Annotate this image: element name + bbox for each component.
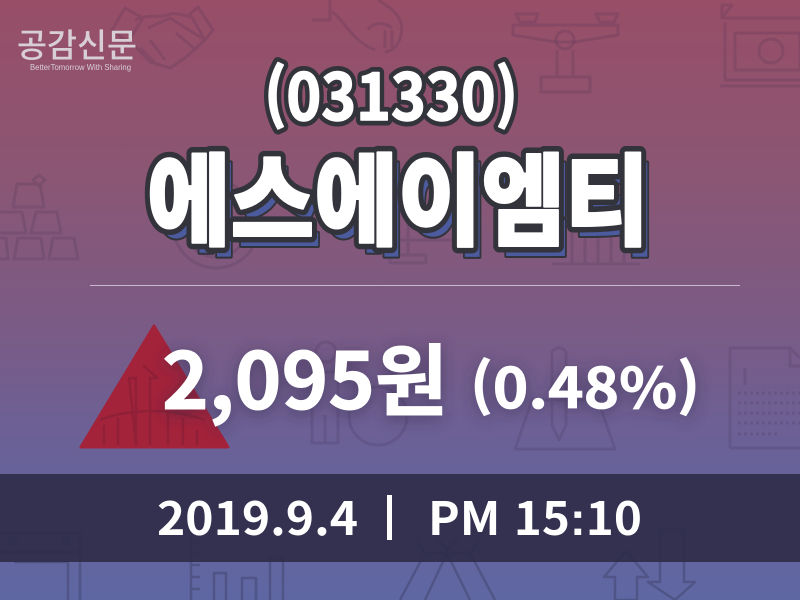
icon: coin <box>173 182 259 268</box>
icon: handshake <box>112 7 213 68</box>
separator <box>387 495 392 540</box>
icon: pencil on paper <box>515 348 615 449</box>
icon: up and down arrows <box>604 530 695 600</box>
icon: money bag <box>400 538 495 600</box>
stock code <box>264 47 518 139</box>
stock code outline: (031330) <box>264 47 518 139</box>
price shadow: 2,095원 <box>162 323 448 435</box>
name fill: 에스에이엠티 <box>147 121 649 266</box>
stock code fill: (031330) <box>264 47 518 139</box>
change percent shadow: (0.48%) <box>470 347 700 428</box>
up triangle <box>81 326 228 447</box>
icon: calendar <box>0 533 80 600</box>
icon: bank note house <box>720 5 800 86</box>
logo tagline: BetterTomorrow With Sharing <box>30 62 131 72</box>
date band <box>0 474 800 562</box>
icon: hand with coin <box>312 0 402 52</box>
change percent: (0.48%) <box>470 344 700 425</box>
bottom finance icons <box>0 530 695 600</box>
name outline: 에스에이엠티 <box>147 121 649 266</box>
price: 2,095원 <box>162 320 448 432</box>
logo wordmark: 공감신문 <box>17 19 137 67</box>
icon: gold bars <box>0 175 78 259</box>
logo <box>17 19 137 72</box>
time: PM 15:10 <box>428 483 642 549</box>
icon: person with coin <box>312 342 407 445</box>
icon: monitor <box>390 170 470 263</box>
name shadow: 에스에이엠티 <box>154 131 656 276</box>
icon: bar columns <box>552 180 640 264</box>
background finance icons <box>0 0 800 449</box>
icon: balance scale <box>513 14 618 92</box>
icon: bar chart <box>191 530 283 600</box>
icon: document <box>730 348 800 448</box>
date: 2019.9.4 <box>157 483 358 549</box>
icon: arrow chart in triangle <box>100 365 205 445</box>
divider line <box>90 285 740 286</box>
company name <box>147 121 656 276</box>
